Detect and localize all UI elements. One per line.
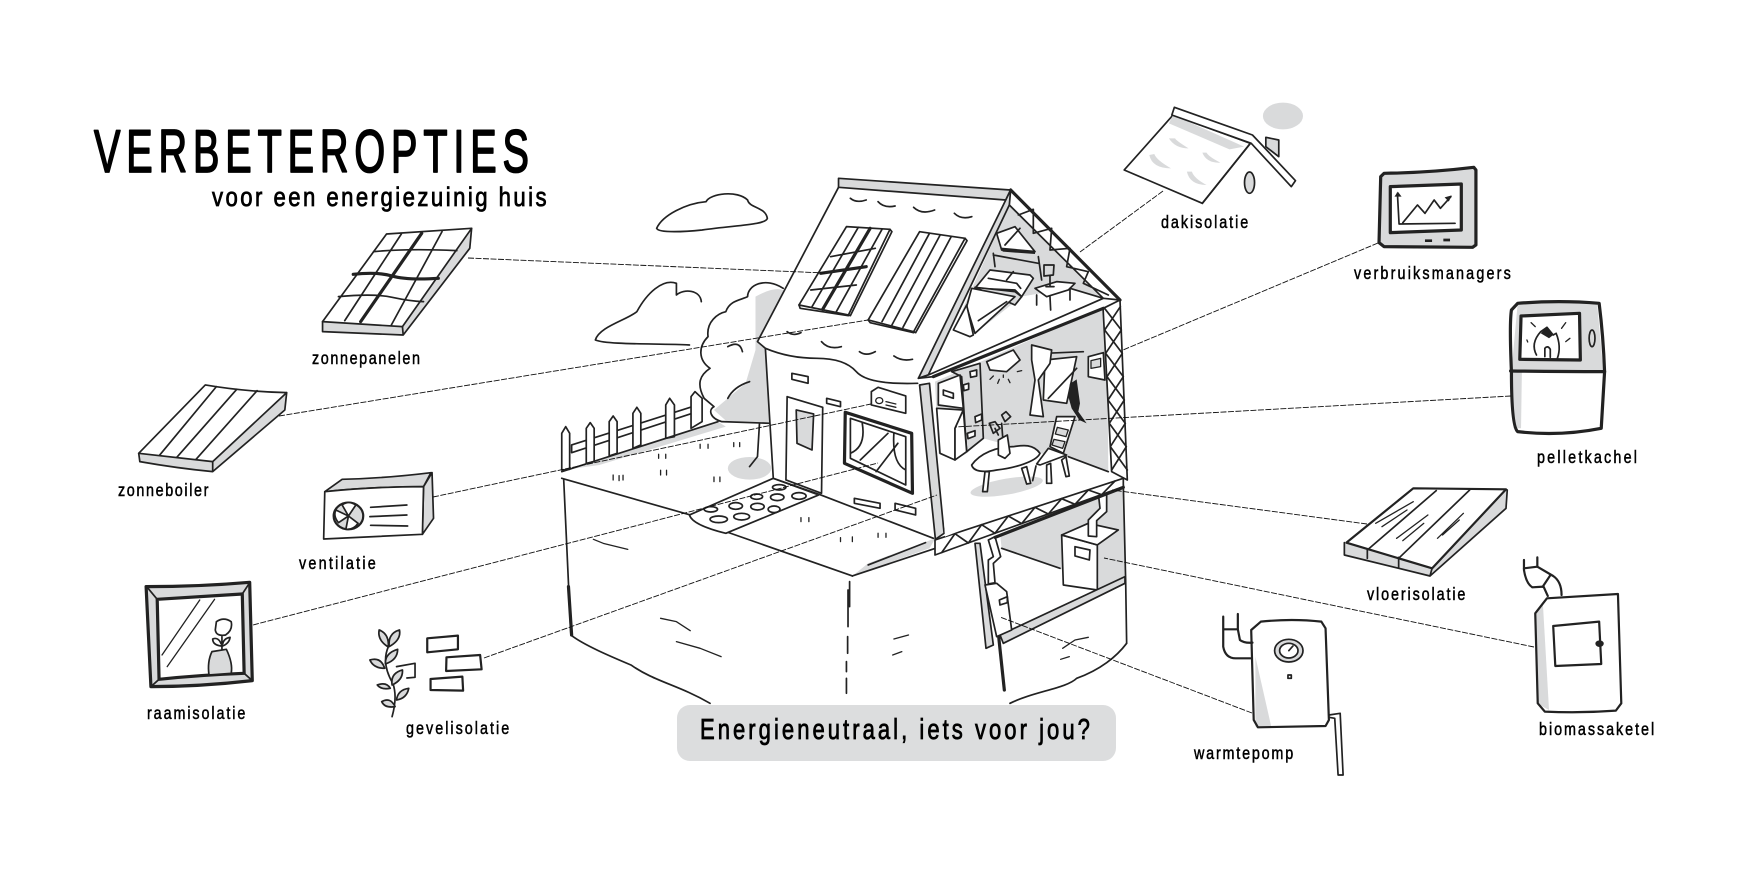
label: zonneboiler: zonneboiler: [118, 481, 209, 500]
icon: pelletkachel: [1510, 302, 1605, 434]
solar panel on roof: [799, 227, 890, 315]
label: pelletkachel: pelletkachel: [1537, 448, 1637, 467]
icon: zonnepanelen: [323, 228, 472, 335]
vase and flowers: [998, 435, 1010, 458]
fence: [562, 392, 726, 470]
meter box: [1088, 353, 1105, 380]
floor beam: [918, 298, 1120, 378]
label: verbruiksmanagers: verbruiksmanagers: [1354, 264, 1511, 283]
callout: energieneutraal: Energieneutraal, iets voor jou?: [700, 714, 1090, 746]
roof truss: [1009, 205, 1108, 298]
cloud: upper: [657, 194, 767, 232]
attic and roof edge: [918, 190, 1120, 378]
label: vloerisolatie: vloerisolatie: [1367, 585, 1465, 604]
title: VERBETEROPTIES: [94, 118, 529, 185]
label: dakisolatie: dakisolatie: [1161, 213, 1248, 232]
icon: verbruiksmanagers: [1379, 167, 1476, 247]
attic window: [997, 227, 1035, 252]
label: raamisolatie: raamisolatie: [147, 704, 245, 723]
room window: [1043, 357, 1077, 403]
living room: [935, 300, 1127, 537]
label: warmtepomp: warmtepomp: [1193, 744, 1293, 763]
front window: [844, 412, 912, 493]
bed: [993, 253, 1042, 280]
icon: dakisolatie: [1124, 103, 1303, 203]
label: gevelisolatie: gevelisolatie: [406, 719, 509, 738]
icon: gevelisolatie: [370, 630, 482, 717]
curtain: [1030, 345, 1052, 417]
icon: warmtepomp: [1223, 614, 1343, 775]
soil block: [564, 480, 909, 703]
leader lines: [253, 191, 1534, 713]
roof: [757, 178, 1011, 383]
solar boiler on roof: [868, 232, 965, 332]
wardrobe: [952, 363, 983, 452]
door: [786, 397, 823, 493]
table: [972, 446, 1040, 471]
bedside table and lamp: [1035, 282, 1075, 297]
ceiling lamp: [987, 350, 1020, 372]
basement: [935, 478, 1127, 703]
ground and paving: [562, 422, 935, 576]
wall bricks: [792, 373, 916, 515]
cloud: lower: [595, 282, 701, 345]
label: ventilatie: ventilatie: [299, 554, 376, 573]
icon: raamisolatie: [146, 582, 252, 687]
icon: zonneboiler: [139, 385, 287, 472]
house front wall: [765, 348, 944, 539]
subtitle: voor een energiezuinig huis: [212, 183, 547, 213]
roof edge strip: [918, 190, 1011, 378]
side truss: [1103, 300, 1127, 480]
label: zonnepanelen: zonnepanelen: [312, 349, 420, 368]
tree: [700, 283, 783, 480]
AC unit on wall: [871, 387, 906, 413]
door window: [796, 410, 814, 450]
callout: energieneutraal: [677, 705, 1116, 761]
label: biomassaketel: biomassaketel: [1539, 720, 1654, 739]
chair: [1050, 417, 1075, 453]
floor truss: [935, 478, 1123, 555]
cat: [1068, 379, 1087, 423]
icon: ventilatie: [324, 473, 434, 539]
house illustration: [562, 178, 1127, 703]
icon: biomassaketel: [1524, 557, 1621, 712]
icon: vloerisolatie: [1344, 488, 1507, 576]
